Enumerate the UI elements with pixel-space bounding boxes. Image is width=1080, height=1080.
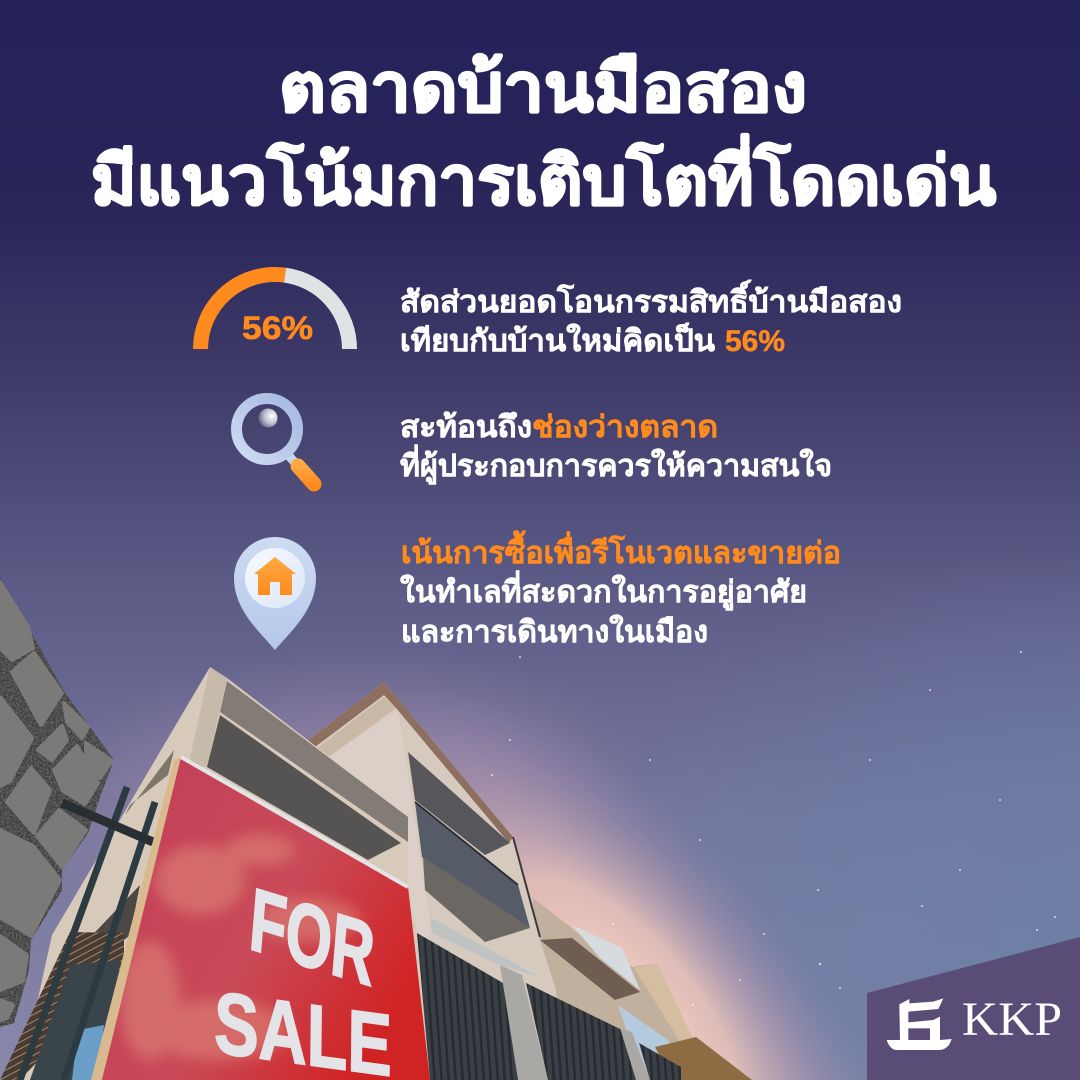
photo: black slat fence	[417, 933, 681, 1080]
text: renovate and resell	[400, 530, 841, 649]
title: มีแนวโน้มการเติบโตที่โดดเด่น	[91, 133, 996, 219]
text: market gap	[400, 411, 832, 485]
text: renovate and resell: เน้นการซื้อเพื่อรีโนเวตและขายต่อ	[401, 530, 841, 570]
text: market gap: ช่องว่างตลาด	[532, 411, 718, 444]
photo: distant apartment buildings	[533, 898, 752, 1080]
icon: 56% half gauge	[200, 275, 350, 349]
text: share of second-hand transfers: เทียบกับบ้านใหม่คิดเป็น	[400, 322, 716, 358]
photo: main building walls	[0, 667, 562, 1080]
text: share of second-hand transfers	[400, 279, 902, 358]
text: market gap: ที่ผู้ประกอบการควรให้ความสนใจ	[400, 444, 832, 485]
photo: sign support posts	[20, 787, 155, 1080]
photo: red for sale sign: FOR	[246, 871, 378, 1006]
photo: stone wall	[0, 577, 114, 1027]
logo panel: KKP: KKP	[962, 993, 1062, 1046]
title	[91, 51, 996, 219]
text: market gap: สะท้อนถึง	[400, 411, 532, 444]
text: share of second-hand transfers: สัดส่วนยอดโอนกรรมสิทธิ์บ้านมือสอง	[400, 279, 902, 319]
icon: 56% half gauge: 56%	[242, 310, 313, 346]
text: renovate and resell: ในทำเลที่สะดวกในการอยู่อาศัย	[400, 570, 807, 611]
text: share of second-hand transfers: 56%	[725, 325, 785, 358]
stars in sky	[491, 651, 1056, 1006]
icon: magnifying glass	[236, 398, 314, 484]
photo: red for sale sign	[91, 757, 430, 1080]
icon: location pin with house	[234, 537, 316, 650]
text: renovate and resell: และการเดินทางในเมือง	[401, 614, 708, 649]
logo panel: KKP	[867, 937, 1080, 1080]
title: ตลาดบ้านมือสอง	[279, 51, 807, 126]
